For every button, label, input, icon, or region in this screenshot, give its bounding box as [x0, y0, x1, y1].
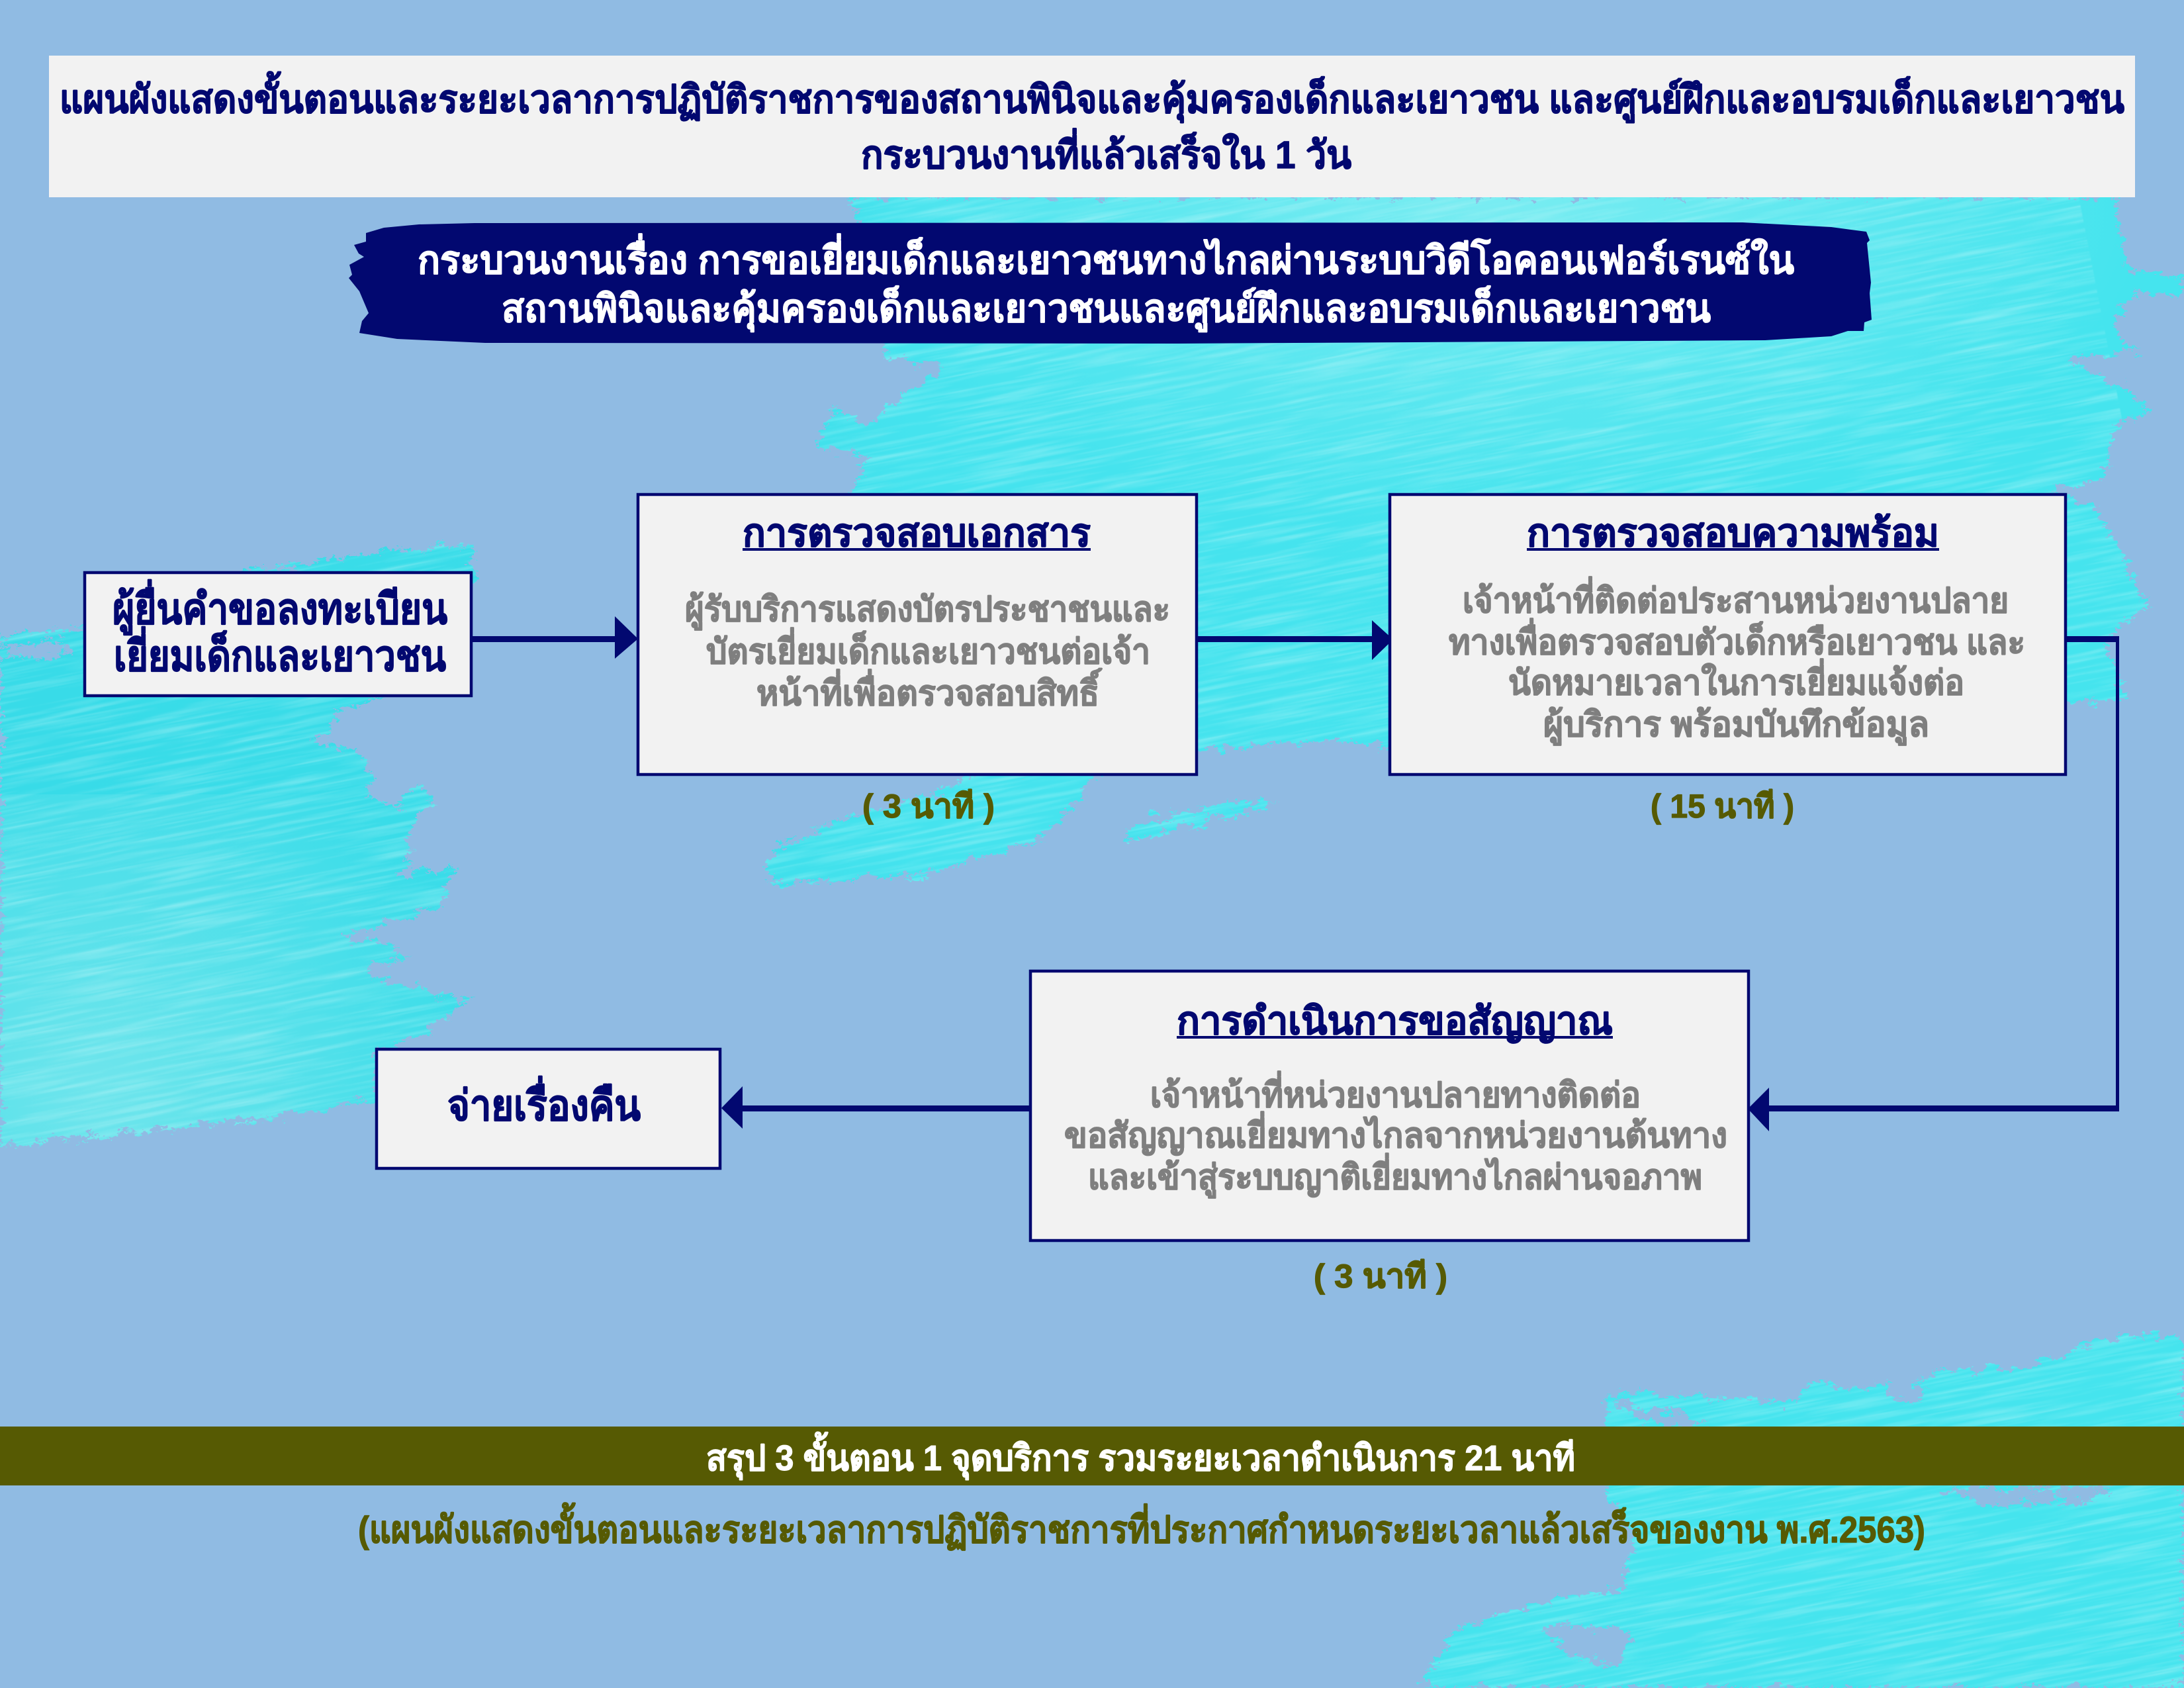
process name banner: กระบวนงานเรื่อง การขอเยี่ยมเด็กและเยาวชนทางไกลผ่านระบบวิดีโอคอนเฟอร์เรนซ์ใน [418, 233, 1794, 282]
body: signal request: เจ้าหน้าที่หน่วยงานปลายทางติดต่อ [1150, 1071, 1641, 1115]
step box: return [377, 1049, 720, 1168]
step box: readiness check [1390, 494, 2066, 774]
process name banner: สถานพินิจและคุ้มครองเด็กและเยาวชนและศูนย์ฝึกและอบรมเด็กและเยาวชน [502, 285, 1711, 333]
body: readiness check: เจ้าหน้าที่ติดต่อประสานหน่วยงานปลาย [1463, 577, 2009, 620]
arrow: signal request to return [721, 1086, 1030, 1129]
duration: 3 minutes: ( 3 นาที ) [1314, 1258, 1447, 1295]
summary band: สรุป 3 ขั้นตอน 1 จุดบริการ รวมระยะเวลาดำเนินการ 21 นาที [706, 1432, 1575, 1481]
body: signal request: ขอสัญญาณเยี่ยมทางไกลจากหน่วยงานต้นทาง [1064, 1111, 1727, 1156]
arrow: readiness check down to signal request [1748, 636, 2119, 1131]
step box: signal request [1030, 971, 1749, 1241]
body: document check: บัตรเยี่ยมเด็กและเยาวชนต่อเจ้า [706, 628, 1150, 671]
step box: document check [638, 494, 1197, 774]
body: document check [685, 590, 1170, 713]
body: signal request: และเข้าสู่ระบบญาติเยี่ยมทางไกลผ่านจอภาพ [1088, 1153, 1702, 1199]
heading: signal request: การดำเนินการขอสัญญาณ [1177, 1000, 1613, 1043]
step box: return: จ่ายเรื่องคืน [447, 1076, 641, 1129]
process name banner [349, 222, 1872, 344]
duration: 15 minutes: ( 15 นาที ) [1651, 788, 1794, 825]
body: readiness check: ผู้บริการ พร้อมบันทึกข้อมูล [1543, 706, 1929, 746]
body: readiness check: นัดหมายเวลาในการเยี่ยมแจ้งต่อ [1508, 659, 1964, 702]
body: readiness check: ทางเพื่อตรวจสอบตัวเด็กหรือเยาวชน และ [1449, 618, 2025, 662]
arrow: applicant to document check [471, 616, 638, 659]
step box: applicant: ผู้ยื่นคำขอลงทะเบียน [113, 579, 447, 635]
heading: readiness check: การตรวจสอบความพร้อม [1527, 512, 1939, 555]
step box: applicant: เยี่ยมเด็กและเยาวชน [114, 626, 446, 680]
body: document check: ผู้รับบริการแสดงบัตรประชาชนและ [685, 590, 1170, 631]
body: signal request [1064, 1071, 1727, 1199]
arrow: document check to readiness check [1197, 620, 1393, 660]
body: readiness check [1449, 577, 2025, 746]
heading: document check: การตรวจสอบเอกสาร [743, 512, 1091, 555]
body: document check: หน้าที่เพื่อตรวจสอบสิทธิ์ [756, 668, 1103, 713]
step box: applicant [85, 573, 471, 696]
footnote: (แผนผังแสดงขั้นตอนและระยะเวลาการปฏิบัติราชการที่ประกาศกำหนดระยะเวลาแล้วเสร็จของงาน พ.ศ.2563) [358, 1503, 1925, 1550]
duration: 3 minutes: ( 3 นาที ) [862, 788, 995, 825]
title panel: กระบวนงานที่แล้วเสร็จใน 1 วัน [861, 128, 1351, 177]
summary band [0, 1427, 2184, 1485]
title panel [49, 56, 2135, 197]
